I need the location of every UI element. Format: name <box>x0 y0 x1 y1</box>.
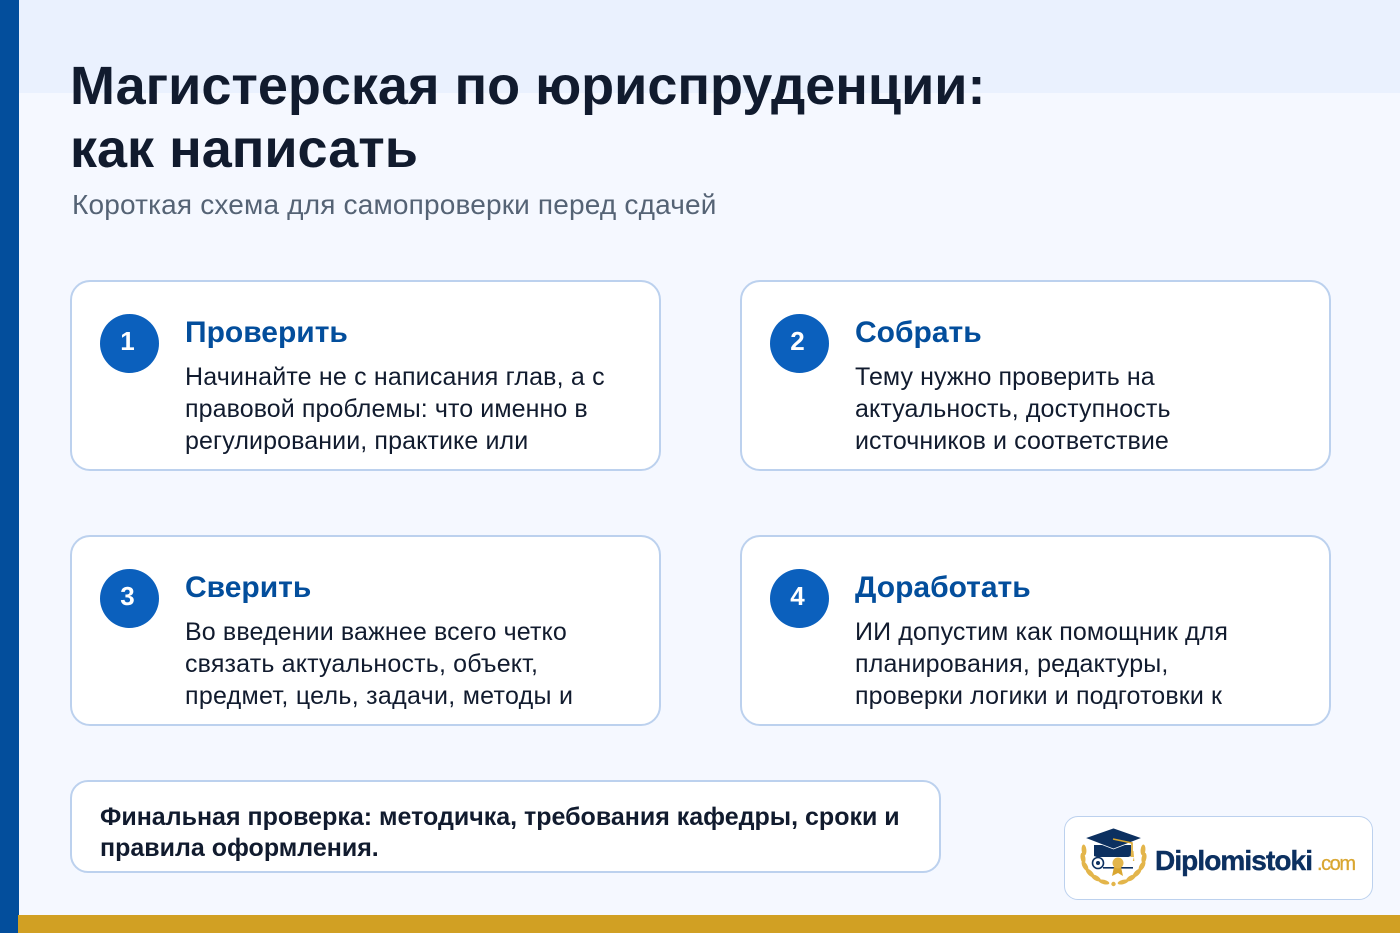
left accent bar <box>0 0 19 933</box>
step 3 text: предмет, цель, задачи, методы и <box>185 682 573 710</box>
logo wordmark: .com <box>1317 853 1356 875</box>
step 1 heading: Проверить <box>185 316 348 349</box>
step 3 number <box>100 569 159 628</box>
step 1 text: правовой проблемы: что именно в <box>185 395 588 423</box>
step 2 number: 2 <box>790 326 805 356</box>
step 1 text: регулировании, практике или <box>185 427 528 455</box>
panel: step 3 <box>70 535 661 726</box>
callout: final check <box>70 780 941 873</box>
panel: step 1 <box>70 280 661 471</box>
step 3 text <box>185 618 573 710</box>
step 2 text <box>855 363 1171 455</box>
step 1 number: 1 <box>120 326 135 356</box>
step 1 number <box>100 314 159 373</box>
title <box>70 56 985 179</box>
callout: final check: Финальная проверка: методичка, требования кафедры, сроки и <box>100 803 900 831</box>
step 1 text <box>185 363 605 455</box>
step 3 text: связать актуальность, объект, <box>185 650 538 678</box>
step 3 heading: Сверить <box>185 571 311 604</box>
subtitle: Короткая схема для самопроверки перед сдачей <box>72 189 717 220</box>
title: как написать <box>70 119 418 179</box>
step 4 text: планирования, редактуры, <box>855 650 1169 678</box>
step 2 text: источников и соответствие <box>855 427 1169 455</box>
panel: step 4 <box>740 535 1331 726</box>
bottom accent bar <box>18 915 1400 933</box>
callout: final check: правила оформления. <box>100 834 379 862</box>
step 4 text: проверки логики и подготовки к <box>855 682 1222 710</box>
step 4 text: ИИ допустим как помощник для <box>855 618 1228 646</box>
step 2 number <box>770 314 829 373</box>
logo: Diplomistoki <box>1064 816 1373 900</box>
step 4 text <box>855 618 1228 710</box>
step 4 number <box>770 569 829 628</box>
title: Магистерская по юриспруденции: <box>70 56 985 116</box>
header band <box>18 0 1400 93</box>
icon: graduation cap with diploma and laurel <box>1080 828 1147 886</box>
step 2 text: Тему нужно проверить на <box>855 363 1155 391</box>
step 1 text: Начинайте не с написания глав, а с <box>185 363 605 391</box>
panel: step 2 <box>740 280 1331 471</box>
step 2 text: актуальность, доступность <box>855 395 1171 423</box>
step 4 heading: Доработать <box>855 571 1031 604</box>
step 2 heading: Собрать <box>855 316 982 349</box>
step 3 number: 3 <box>120 581 135 611</box>
step 3 text: Во введении важнее всего четко <box>185 618 567 646</box>
step 4 number: 4 <box>790 581 805 611</box>
logo wordmark: Diplomistoki <box>1155 845 1313 876</box>
